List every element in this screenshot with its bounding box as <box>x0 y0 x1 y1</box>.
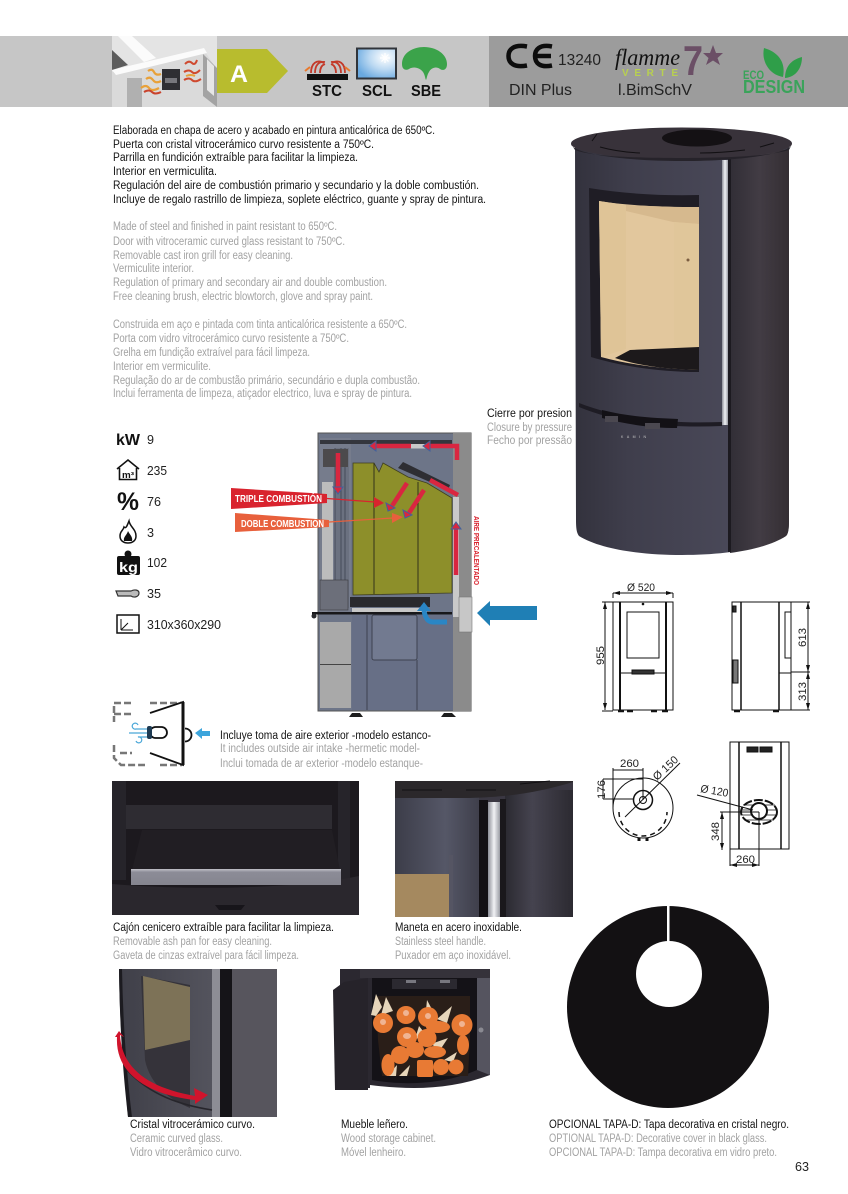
decorative cover disc <box>567 904 769 1108</box>
icon: STC: STC <box>312 83 342 100</box>
flamme verte 7 stars: 7 <box>683 37 703 84</box>
caption: closure by pressure <box>487 408 572 447</box>
flamme verte 7 stars: VERTE <box>622 68 678 79</box>
spec: flue <box>116 587 161 601</box>
caption: curved glass: Cristal vitrocerámico curvo. <box>130 1119 255 1131</box>
caption: handle: Maneta en acero inoxidable. <box>395 922 522 934</box>
spec: firebox dimensions: 310x360x290 <box>147 618 221 632</box>
spec: firebox dimensions <box>117 615 221 633</box>
caption: decorative cover: OPCIONAL TAPA-D: Tapa decorativa en cristal negro. <box>549 1119 789 1131</box>
header band: right <box>489 36 848 107</box>
icon: SCL <box>357 48 396 100</box>
caption: outside air intake: Incluye toma de aire exterior -modelo estanco- <box>220 730 431 742</box>
photo: ash pan <box>112 781 359 915</box>
callout: double combustion <box>235 513 403 532</box>
spec: power: kW <box>116 432 141 449</box>
spec: power <box>116 432 154 449</box>
caption: closure by pressure: Cierre por presion <box>487 408 572 420</box>
text block: Spanish description: Puerta con cristal vitrocerámico curvo resistente a 750ºC. <box>113 139 374 151</box>
energy class arrow A: A <box>230 61 248 88</box>
caption: wood storage: Móvel lenheiro. <box>341 1147 406 1159</box>
flamme verte 7 stars: flamme <box>615 45 680 70</box>
text block: English description <box>113 221 387 303</box>
spec: heated volume: 235 <box>147 464 167 478</box>
text block: Portuguese description: Construida em aço e pintada com tinta anticalórica resistente a 650ºC. <box>113 319 407 331</box>
text block: Portuguese description: Porta com vidro vitrocerámico curvo resistente a 750ºC. <box>113 333 349 345</box>
arrow: air intake <box>477 601 537 626</box>
caption: outside air intake <box>220 730 431 770</box>
caption: decorative cover: OPCIONAL TAPA-D: Tampa decorativa em vidro preto. <box>549 1147 777 1159</box>
caption: outside air intake: Inclui tomada de ar exterior -modelo estanque- <box>220 758 423 770</box>
energy class arrow A <box>217 49 288 93</box>
technical drawing: rear view: Ø 120 <box>699 783 729 800</box>
caption: curved glass <box>130 1119 255 1159</box>
spec: weight <box>117 550 167 575</box>
technical drawing: top view: 260 <box>620 758 639 770</box>
icon: SBE: SBE <box>411 83 441 100</box>
spec: weight: 102 <box>147 556 167 570</box>
text block: English description: Door with vitroceramic curved glass resistant to 750ºC. <box>113 236 345 248</box>
caption: curved glass: Ceramic curved glass. <box>130 1133 223 1145</box>
text block: Portuguese description: Interior em vermiculite. <box>113 361 211 373</box>
caption: ash pan: Gaveta de cinzas extraível para fácil limpeza. <box>113 950 299 962</box>
icon: STC <box>305 61 350 100</box>
caption: decorative cover: OPTIONAL TAPA-D: Decorative cover in black glass. <box>549 1133 767 1145</box>
spec: efficiency <box>117 488 161 516</box>
text block: English description: Made of steel and finished in paint resistant to 650ºC. <box>113 221 337 233</box>
page number: 63 <box>795 1160 809 1174</box>
callout: double combustion: DOBLE COMBUSTIÓN <box>241 517 324 530</box>
label: preheated air: AIRE PRECALENTADO <box>472 516 481 585</box>
technical drawing: front view: 955 <box>595 646 607 665</box>
callout: triple combustion: TRIPLE COMBUSTIÓN <box>235 492 322 505</box>
text block: English description: Removable cast iron grill for easy cleaning. <box>113 250 293 262</box>
technical drawing: side view: 613 <box>797 628 809 647</box>
spec: weight: kg <box>119 560 138 575</box>
caption: decorative cover <box>549 1119 789 1159</box>
header band: left <box>0 36 489 107</box>
eco design logo: ECO <box>743 68 764 82</box>
icon: SBE <box>402 47 447 100</box>
caption: handle: Puxador em aço inoxidável. <box>395 950 511 962</box>
text block: Spanish description <box>113 125 486 206</box>
callout: triple combustion <box>231 488 384 509</box>
CE mark 13240 DIN Plus: DIN Plus <box>509 82 572 99</box>
flamme verte 7 stars <box>615 37 723 99</box>
technical drawing: rear view: 260 <box>736 854 755 866</box>
stove lower door and controls <box>579 403 722 439</box>
icon: room with heat distribution <box>112 36 217 107</box>
text block: Spanish description: Parrilla en fundición extraíble para facilitar la limpieza. <box>113 152 358 164</box>
arrow: curved red <box>115 1031 208 1104</box>
text block: English description: Regulation of primary and secondary air and double combustion. <box>113 277 387 289</box>
text block: English description: Free cleaning brush, electric blowtorch, glove and spray paint. <box>113 291 373 303</box>
text block: Portuguese description <box>113 319 420 400</box>
eco design logo <box>743 48 805 97</box>
caption: ash pan: Removable ash pan for easy cleaning. <box>113 936 272 948</box>
logs <box>371 994 472 1077</box>
spec: heated volume <box>117 460 167 480</box>
spec: flame: 3 <box>147 526 154 540</box>
spec: power: 9 <box>147 433 154 447</box>
text block: English description: Vermiculite interior. <box>113 263 194 275</box>
caption: wood storage: Mueble leñero. <box>341 1119 408 1131</box>
technical drawing: rear view <box>697 742 789 867</box>
caption: wood storage: Wood storage cabinet. <box>341 1133 436 1145</box>
technical drawing: top view: Ø 150 <box>651 754 681 783</box>
caption: handle <box>395 922 522 962</box>
stove window <box>589 188 699 372</box>
CE mark 13240 DIN Plus: 13240 <box>558 52 601 69</box>
technical drawing: rear view: 348 <box>710 822 722 841</box>
icon: outside air intake <box>114 702 210 765</box>
icon: SCL: SCL <box>362 83 392 100</box>
section diagram <box>312 433 472 717</box>
CE mark 13240 DIN Plus <box>508 46 601 99</box>
text block: Portuguese description: Grelha em fundição extraível para fácil limpeza. <box>113 347 310 359</box>
caption: wood storage <box>341 1119 436 1159</box>
photo: wood storage <box>333 969 490 1090</box>
photo: stainless steel handle <box>395 781 573 917</box>
text block: Spanish description: Interior en vermiculita. <box>113 166 217 178</box>
text block: Portuguese description: Inclui ferramenta de limpeza, atiçador electrico, luva e spray de pintura. <box>113 388 412 400</box>
stove handle <box>722 160 728 425</box>
flamme verte 7 stars: l.BimSchV <box>618 82 692 99</box>
technical drawing: front view <box>595 582 673 711</box>
spec: efficiency: % <box>117 488 139 516</box>
spec: flame <box>120 521 154 543</box>
technical drawing: front view: Ø 520 <box>627 582 655 594</box>
eco design logo: DESIGN <box>743 77 805 97</box>
technical drawing: top view <box>596 754 681 841</box>
caption: closure by pressure: Closure by pressure <box>487 422 572 434</box>
spec: heated volume: m³ <box>122 470 134 480</box>
text block: Spanish description: Regulación del aire de combustión primario y secundario y la doble combustión. <box>113 180 479 192</box>
stove lower door and controls: KAMIN <box>621 435 646 439</box>
caption: curved glass: Vidro vitrocerâmico curvo. <box>130 1147 242 1159</box>
technical drawing: side view <box>732 602 810 711</box>
photo: curved glass <box>115 969 277 1117</box>
technical drawing: side view: 313 <box>797 682 809 701</box>
caption: ash pan <box>113 922 334 962</box>
caption: ash pan: Cajón cenicero extraíble para facilitar la limpieza. <box>113 922 334 934</box>
technical drawing: top view: 176 <box>596 780 608 799</box>
caption: outside air intake: It includes outside air intake -hermetic model- <box>220 743 420 755</box>
text block: Portuguese description: Regulação do ar de combustão primário, secundário e dupla combustão. <box>113 375 420 387</box>
text block: Spanish description: Incluye de regalo rastrillo de limpieza, soplete eléctrico, guante y spray de pintura. <box>113 194 486 206</box>
spec: efficiency: 76 <box>147 495 161 509</box>
main stove illustration <box>571 128 792 555</box>
spec: flue: 35 <box>147 587 161 601</box>
text block: Spanish description: Elaborada en chapa de acero y acabado en pintura anticalórica de 650ºC. <box>113 125 435 137</box>
caption: closure by pressure: Fecho por pressão <box>487 435 572 447</box>
caption: handle: Stainless steel handle. <box>395 936 486 948</box>
